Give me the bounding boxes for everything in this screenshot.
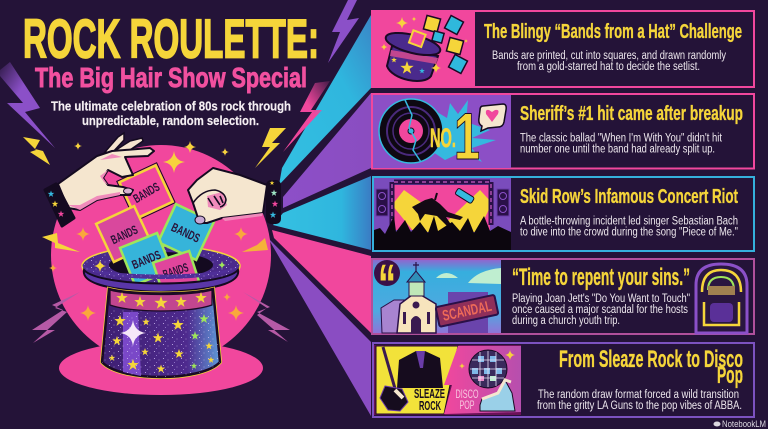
panel 3 body xyxy=(520,216,738,238)
panel 5 body xyxy=(537,389,742,412)
tagline xyxy=(51,98,291,128)
band cards xyxy=(96,163,214,293)
panel 3: Skid Row xyxy=(373,177,754,251)
panel 2 image: broken vinyl and No.1 xyxy=(373,95,511,173)
band cards: BANDS xyxy=(109,223,140,247)
panel 4 body: during a church youth trip. xyxy=(512,315,620,327)
panel 1: bands from a hat xyxy=(372,11,754,87)
panel 2 body: number one until the band had already split up. xyxy=(520,144,715,156)
panel 2 image: broken vinyl and No.1: NO. xyxy=(430,123,456,153)
hat brim back xyxy=(82,246,240,286)
panel 5 image: leather jacket and disco ball: POP xyxy=(460,398,474,412)
band cards: BANDS xyxy=(161,260,190,282)
right wristband xyxy=(266,180,281,224)
panel 5: sleaze rock to disco pop xyxy=(373,343,754,417)
panel 5 image: leather jacket and disco ball xyxy=(374,345,521,415)
tagline: The ultimate celebration of 80s rock through xyxy=(51,98,291,114)
sparkles xyxy=(49,141,248,321)
panel 5 image: leather jacket and disco ball: ROCK xyxy=(419,398,441,413)
panel 4 image: church and scandal stamp: “ xyxy=(378,252,396,315)
left wristband xyxy=(45,184,74,226)
panel 4: repent your sins xyxy=(372,252,754,334)
pink spotlight circle and floor xyxy=(51,145,271,395)
panel 4 body: once caused a major scandal for the hosts xyxy=(512,304,688,316)
hat body xyxy=(102,289,220,377)
right hand xyxy=(188,168,267,224)
title: ROCK ROULETTE: xyxy=(23,8,319,70)
hat stars xyxy=(94,260,226,373)
band cards: BANDS xyxy=(131,180,162,206)
panel 5 heading: Pop xyxy=(717,362,743,389)
band cards: BANDS xyxy=(130,248,163,272)
panel 3 image: concert stage xyxy=(374,178,511,250)
tagline: unpredictable, random selection. xyxy=(82,113,259,128)
light beams from hat to panels xyxy=(268,15,371,416)
panel 2: Sheriff xyxy=(372,94,754,173)
panel 1 body xyxy=(492,50,726,73)
panel 1 image: hat with flying squares xyxy=(372,11,475,87)
panel 5 image: leather jacket and disco ball: SLEAZE xyxy=(414,386,445,401)
band cards: BANDS xyxy=(169,220,202,246)
icon: jukebox xyxy=(696,264,747,333)
panel 5 image: leather jacket and disco ball: DISCO xyxy=(456,387,478,401)
panel 4 body: Playing Joan Jett's "Do You Want to Touch" xyxy=(512,293,690,305)
hero illustration: hat, hands and band cards xyxy=(32,133,290,395)
panel 4 image: church and scandal stamp: SCANDAL xyxy=(441,298,493,325)
lower bolts xyxy=(32,233,290,343)
panel 2 body xyxy=(520,132,723,156)
panel 2 image: broken vinyl and No.1: 1 xyxy=(454,99,480,173)
panel 4 image: church and scandal stamp xyxy=(373,252,501,333)
decorative lightning bolts, upper xyxy=(0,0,359,168)
left hand xyxy=(58,133,154,210)
panel 4 body xyxy=(512,293,690,327)
panel 1 body: from a gold-starred hat to decide the setlist. xyxy=(517,61,700,73)
hat band xyxy=(110,290,212,311)
hat front brim xyxy=(84,270,238,292)
panel 2 body: The classic ballad "When I'm With You" didn't hit xyxy=(520,132,723,144)
panel 5 heading xyxy=(559,346,743,389)
subtitle: The Big Hair Show Special xyxy=(35,62,307,93)
